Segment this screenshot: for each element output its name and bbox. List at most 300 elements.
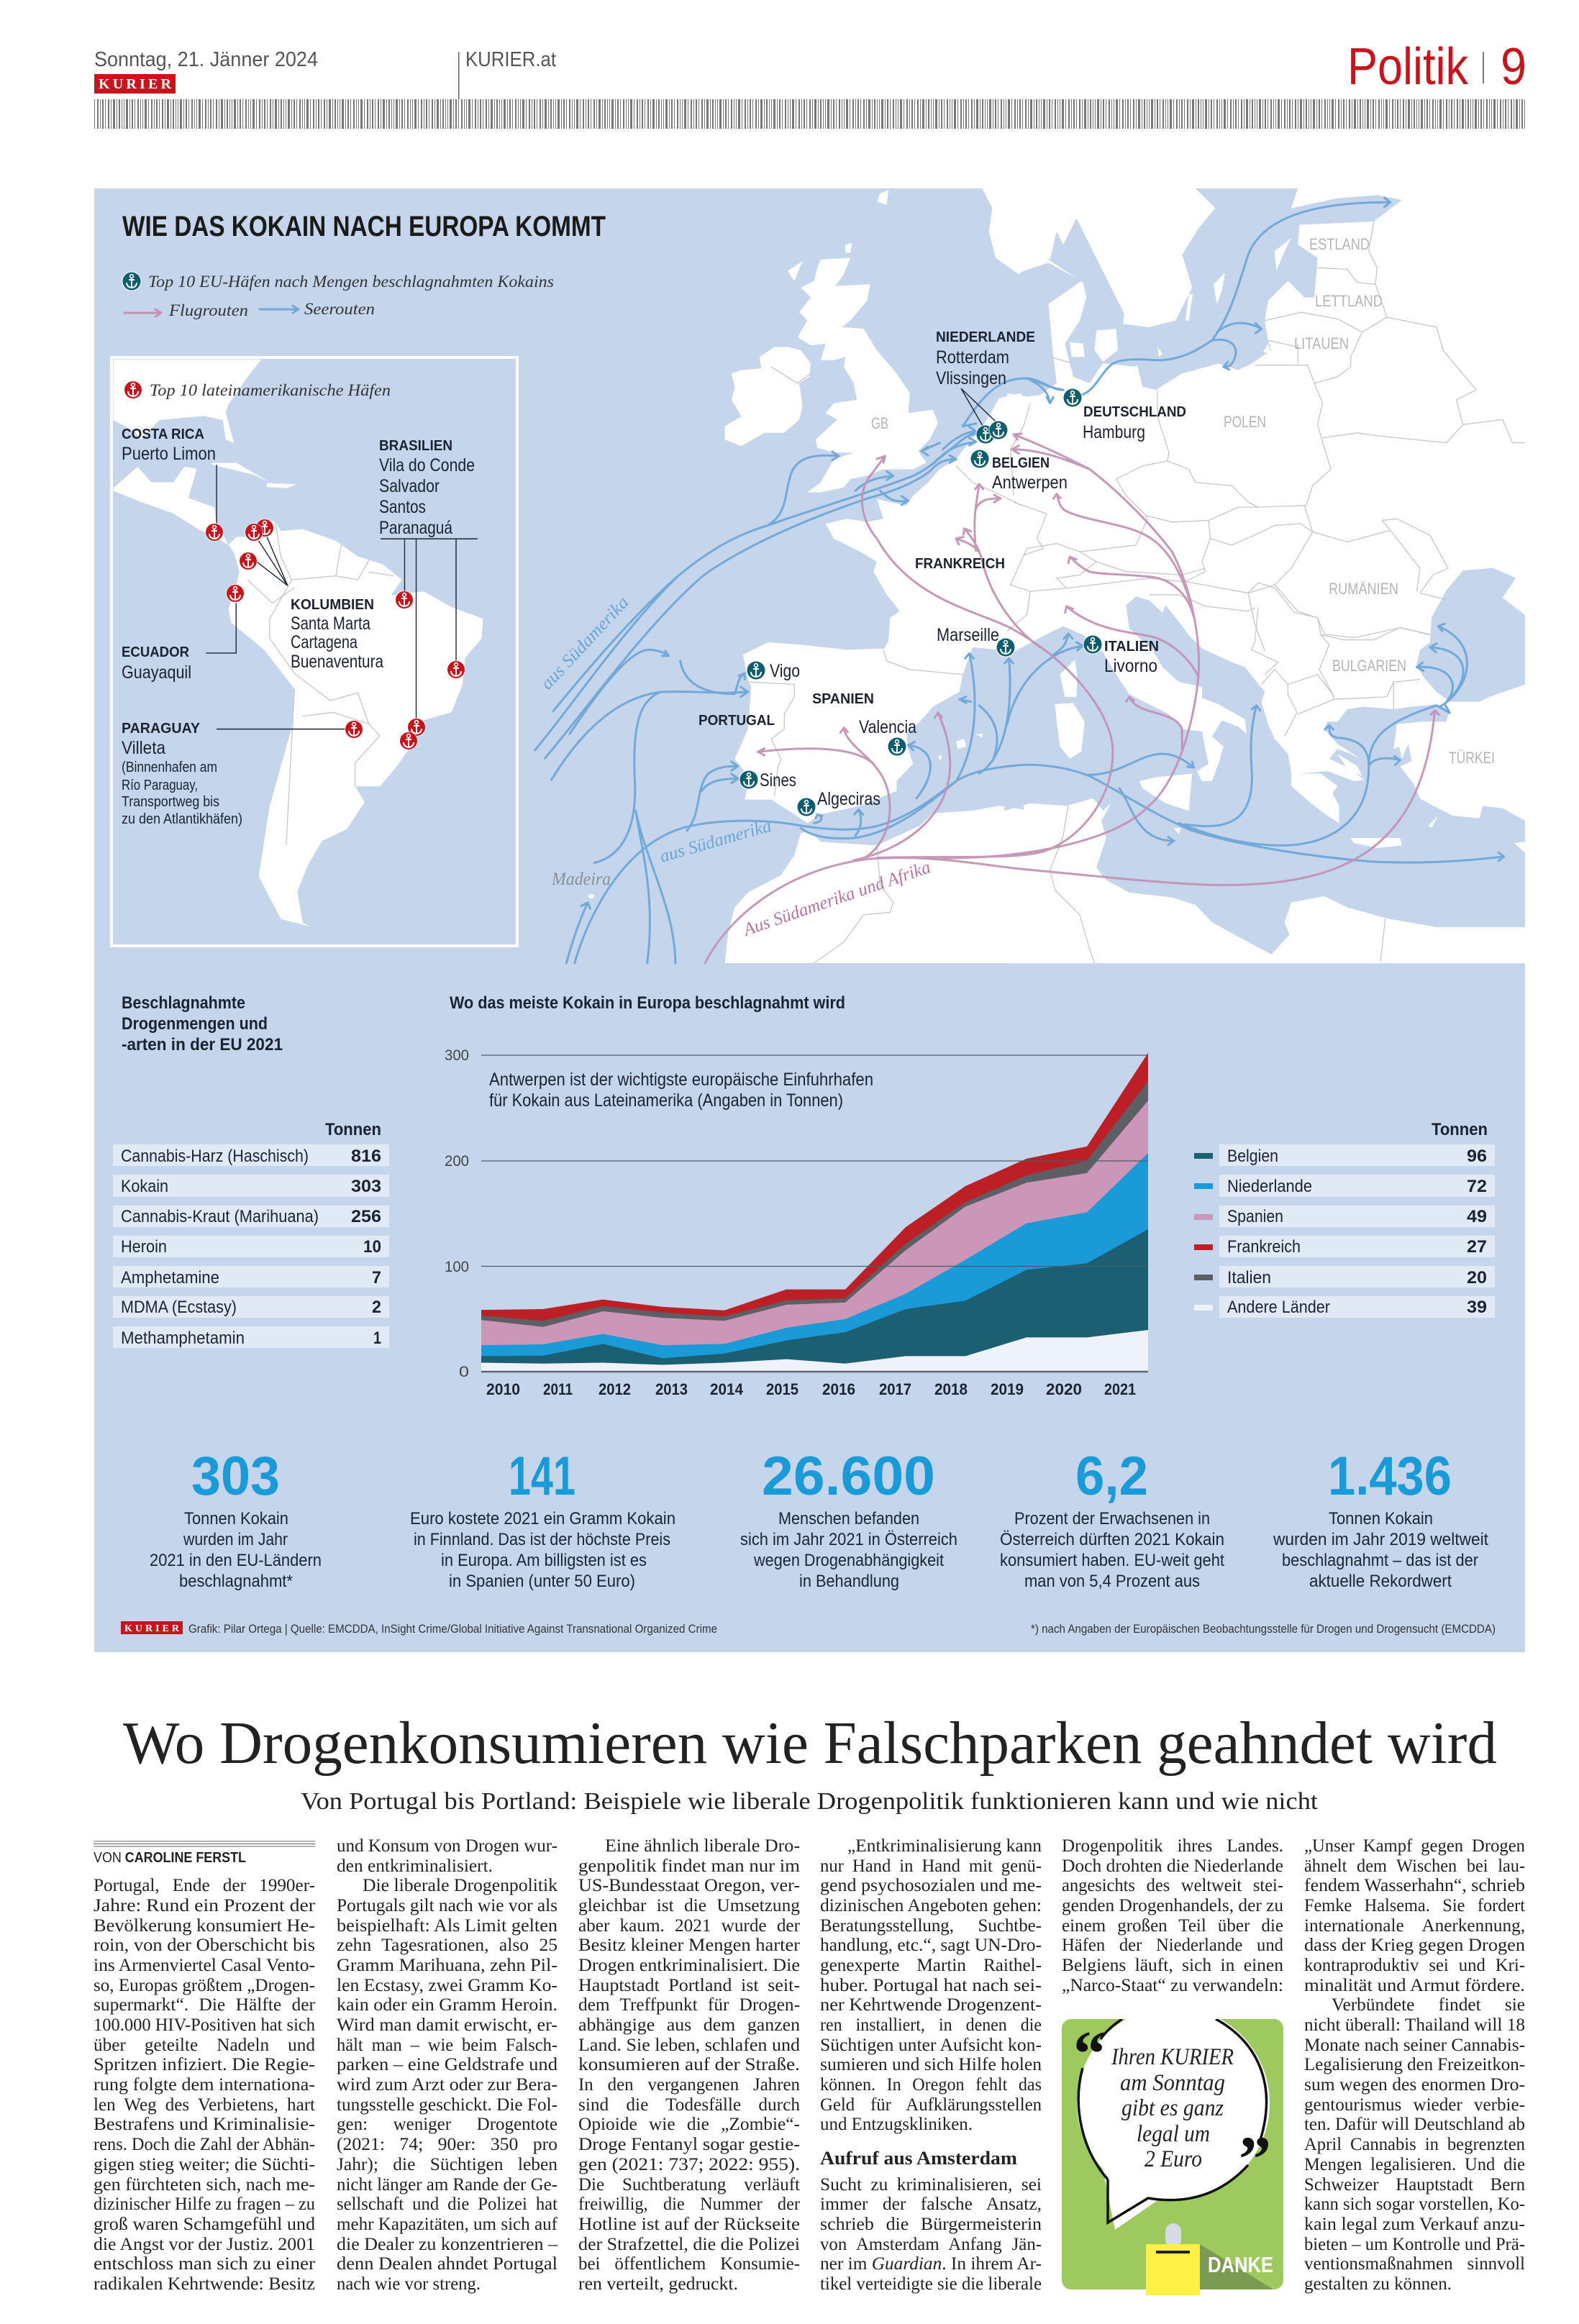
inset labels: Puerto Limon (122, 444, 216, 464)
column 4: Geld für Aufklärungsstellen (820, 2094, 1042, 2115)
ad text: Ihren KURIER (1111, 2044, 1234, 2070)
column 2: kain oder ein Gramm Heroin. (337, 1994, 558, 2015)
column 4 (820, 1835, 1042, 2294)
column 2: hält man – wie beim Falsch- (337, 2034, 558, 2055)
donation box icon (1146, 2223, 1200, 2295)
column 3: Eine ähnlich liberale Dro- (605, 1835, 800, 1856)
column 3: Drogen entkriminalisiert. Die (578, 1954, 800, 1975)
column 4: sumieren und sich Hilfe holen (820, 2054, 1042, 2074)
inset labels: Río Paraguay, (122, 778, 198, 793)
map labels: LETTLAND (1315, 292, 1383, 310)
column 1 (94, 1874, 316, 2294)
map labels: ESTLAND (1309, 235, 1370, 253)
column 4: nur Hand in Hand mit genü- (820, 1855, 1042, 1876)
column 6: ten. Dafür will Deutschland ab (1304, 2113, 1525, 2134)
column 6: kann sich sogar vorstellen, Ko- (1304, 2193, 1525, 2214)
column 5: Häfen der Niederlande und (1062, 1934, 1283, 1955)
table rows: 1 (373, 1329, 381, 1348)
chart annotation: Antwerpen ist der wichtigste europäische Einfuhrhafen (489, 1070, 873, 1090)
map labels: Vlissingen (936, 368, 1006, 388)
column 3 (578, 1835, 801, 2294)
column 3: In den vergangenen Jahren (578, 2074, 800, 2095)
column 2: wird zum Arzt oder zur Bera- (337, 2074, 558, 2095)
column 6: April Cannabis in begrenzten (1304, 2133, 1525, 2154)
column 4: tikel verteidigte sie die liberale (820, 2273, 1042, 2294)
sea routes (535, 198, 1504, 963)
ad text: legal um (1137, 2121, 1210, 2147)
inset labels: Buenaventura (291, 652, 383, 672)
column 5: Belgiens läuft, sich in einen (1062, 1954, 1283, 1975)
column 6 (1304, 1835, 1525, 2294)
column 2 (337, 1835, 558, 2294)
inset labels: ECUADOR (122, 644, 190, 660)
column 5: genden Drogenhandels, der zu (1062, 1895, 1283, 1915)
column 4: immer der falsche Ansatz, (820, 2193, 1042, 2214)
column 5 (1062, 1835, 1283, 1995)
inset labels: Villeta (122, 738, 165, 758)
figure: 303 (150, 1446, 322, 1591)
column 2: len Ecstasy, zwei Gramm Ko- (337, 1974, 558, 1995)
column 4: können. In Oregon fehlt das (820, 2074, 1042, 2095)
map labels: Antwerpen (992, 473, 1068, 493)
table rows (113, 1144, 389, 1348)
column 1: gen fürchteten sich, nach me- (94, 2174, 315, 2195)
chart grid (481, 1055, 1148, 1266)
map labels: RUMÄNIEN (1329, 580, 1398, 598)
column 1: so, Europas größtem „Drogen- (94, 1974, 315, 1995)
map labels: DEUTSCHLAND (1083, 404, 1186, 420)
chart legend table (1194, 1120, 1495, 1318)
figure: 141 (410, 1446, 675, 1591)
column 1: entschloss man sich zu einer (94, 2253, 316, 2274)
legend rows: 49 (1467, 1207, 1487, 1226)
column 6: ventionsmaßnahmen sinnvoll (1304, 2253, 1525, 2274)
Iberia and North Africa (588, 642, 1021, 963)
column 4: Sucht zu kriminalisieren, sei (820, 2174, 1042, 2195)
y axis labels: 300 (445, 1047, 469, 1064)
section name: Politik (1347, 38, 1469, 96)
map labels: BELGIEN (992, 455, 1050, 471)
chart annotation (489, 1070, 873, 1111)
x axis labels: 2016 (822, 1380, 855, 1398)
figure: 141: in Europa. Am billigsten ist es (441, 1551, 647, 1570)
column 1: groß waren Schamgefühl und (94, 2213, 315, 2234)
infographic title: WIE DAS KOKAIN NACH EUROPA KOMMT (122, 211, 606, 242)
y axis labels: 100 (445, 1259, 469, 1275)
graphic credits: Grafik: Pilar Ortega | Quelle: EMCDDA, InSight Crime/Global Initiative Against Transnational Organized Crime (188, 1622, 717, 1636)
figure: 6,2: konsumiert haben. EU-weit geht (1000, 1551, 1224, 1570)
column 3: ren verteilt, gedruckt. (578, 2273, 738, 2294)
key figures (150, 1446, 1488, 1591)
Great Britain (798, 258, 938, 492)
legend rows: 27 (1467, 1237, 1487, 1257)
table rows: 2 (372, 1298, 381, 1317)
table rows: Cannabis-Kraut (Marihuana) (121, 1207, 319, 1226)
legend rows: 20 (1467, 1268, 1487, 1288)
map labels: Aus Südamerika und Afrika (740, 857, 933, 940)
page header (94, 38, 1526, 129)
figure: 26.600: wegen Drogenabhängigkeit (753, 1551, 944, 1570)
x axis labels (486, 1380, 1136, 1398)
column 3: genpolitik findet man nur im (578, 1855, 800, 1876)
byline (94, 1841, 315, 1866)
column 3: aber kaum. 2021 wurde der (578, 1915, 800, 1936)
column 2: Wird man damit erwischt, er- (337, 2014, 558, 2035)
inset labels: PARAGUAY (122, 721, 201, 737)
figure: 303: wurden im Jahr (183, 1530, 288, 1549)
map labels: Algeciras (817, 789, 880, 809)
table rows: 7 (372, 1268, 381, 1288)
column 1: ins Armenviertel Casal Vento- (94, 1954, 315, 1975)
EU port markers (739, 388, 1103, 817)
table rows: 816 (351, 1147, 381, 1166)
column 3: Die Suchtberatung verläuft (578, 2174, 800, 2195)
y axis labels: 200 (445, 1153, 469, 1170)
figure: 6,2: 6,2 (1075, 1446, 1148, 1507)
map: Europe (535, 188, 1525, 963)
inset labels: Salvador (379, 476, 440, 496)
inset labels: KOLUMBIEN (291, 597, 374, 613)
column 4: gend psychosozialen und me- (820, 1874, 1042, 1895)
France and Benelux (826, 393, 1021, 816)
inset land (114, 360, 483, 926)
article headline: Wo Drogenkonsumieren wie Falschparken geahndet wird (123, 1710, 1497, 1777)
x axis labels: 2014 (710, 1380, 744, 1398)
column 3: Besitz kleiner Mengen harter (578, 1934, 801, 1955)
column 2: Portugals gilt nach wie vor als (337, 1895, 558, 1915)
ad text: 2 Euro (1145, 2146, 1202, 2172)
chart legend table: Tonnen (1432, 1120, 1488, 1139)
column 3: Land. Sie leben, schlafen und (578, 2034, 800, 2055)
column 6: ähnelt dem Wischen bei lau- (1304, 1855, 1525, 1876)
figure: 141: in Spanien (unter 50 Euro) (449, 1572, 635, 1591)
column 3: freiwillig, die Nummer der (578, 2193, 800, 2214)
x axis labels: 2013 (655, 1380, 688, 1398)
figure: 6,2 (1000, 1446, 1224, 1591)
column 6: sum wegen des enormen Dro- (1304, 2074, 1525, 2095)
table rows: MDMA (Ecstasy) (121, 1298, 237, 1317)
header date: Sonntag, 21. Jänner 2024 (94, 48, 318, 71)
map labels: Livorno (1104, 656, 1157, 676)
inset labels: Santos (379, 497, 426, 517)
donation ad (1062, 2007, 1283, 2295)
map labels: Sines (760, 770, 796, 790)
inset labels: Santa Marta (291, 614, 370, 634)
figure: 303: Tonnen Kokain (184, 1509, 288, 1528)
figure: 303: 2021 in den EU-Ländern (150, 1551, 322, 1570)
legend rows: Niederlande (1227, 1177, 1312, 1196)
figure: 6,2: man von 5,4 Prozent aus (1024, 1572, 1200, 1591)
map labels: NIEDERLANDE (936, 329, 1035, 345)
column 1: Spritzen infiziert. Die Regie- (94, 2054, 315, 2074)
column 3: Droge Fentanyl sogar gestie- (578, 2133, 800, 2154)
donation ad: ” (1239, 2124, 1271, 2195)
x axis labels: 2020 (1046, 1380, 1082, 1398)
table heading: Beschlagnahmte (122, 993, 245, 1013)
map labels: Madeira (551, 870, 611, 889)
table rows: Amphetamine (121, 1268, 219, 1288)
legend rows: Frankreich (1227, 1237, 1301, 1257)
inset labels: (Binnenhafen am (122, 760, 217, 775)
northern and eastern Europe land (983, 188, 1525, 963)
column 3: bei öffentlichem Konsumie- (578, 2253, 800, 2274)
column 6: nicht überall: Thailand will 18 (1304, 2014, 1525, 2035)
inset leader lines (206, 465, 478, 729)
map legend: Top 10 EU-Häfen nach Mengen beschlagnahmten Kokains (148, 273, 554, 291)
column 1: Portugal, Ende der 1990er- (94, 1874, 315, 1895)
column 5: Drogenpolitik ihres Landes. (1062, 1835, 1283, 1856)
ad text: gibt es ganz (1121, 2095, 1224, 2121)
table rows: Methamphetamin (121, 1329, 245, 1348)
table rows: Cannabis-Harz (Haschisch) (121, 1147, 309, 1166)
figure: 26.600: Menschen befanden (778, 1509, 919, 1528)
figure: 141: in Finnland. Das ist der höchste Preis (414, 1530, 670, 1549)
x axis labels: 2019 (991, 1380, 1024, 1398)
graphic credits: *) nach Angaben der Europäischen Beobachtungsstelle für Drogen und Drogensucht (EMCDDA) (1031, 1622, 1496, 1636)
table heading: -arten in der EU 2021 (122, 1035, 283, 1054)
table rows: Heroin (121, 1237, 167, 1257)
column 2: sellschaft und die Polizei hat (337, 2193, 558, 2214)
column 2: beispielhaft: Als Limit gelten (337, 1915, 558, 1936)
column 3: Opioide wie die „Zombie“- (578, 2113, 800, 2134)
map labels: POLEN (1224, 413, 1266, 431)
column 3: der Strafzettel, die die Polizei (578, 2233, 800, 2254)
map labels: Rotterdam (936, 347, 1009, 368)
column 5: „Narco-Staat“ zu verwandeln: (1062, 1974, 1283, 1995)
column 3: gleichbar ist die Umsetzung (578, 1895, 800, 1915)
column 1: dizinischer Hilfe zu fragen – zu (94, 2193, 315, 2214)
KURIER logo: KURIER (99, 76, 172, 92)
article body (94, 1835, 1525, 2294)
column 1: 100.000 HIV-Positiven hat sich (94, 2014, 315, 2035)
column 3: konsumieren auf der Straße. (578, 2054, 800, 2074)
column 4: und Entzugskliniken. (820, 2113, 973, 2134)
article subheading: Von Portugal bis Portland: Beispiele wie liberale Drogenpolitik funktionieren kann und wie nicht (301, 1788, 1319, 1815)
column 5: Doch drohten die Niederlande (1062, 1855, 1283, 1876)
figure: 1.436: wurden im Jahr 2019 weltweit (1273, 1530, 1488, 1549)
country borders (750, 222, 1525, 963)
map labels (537, 235, 1495, 940)
page number: 9 (1501, 38, 1526, 96)
column 1: len Weg des Verbietens, hart (94, 2094, 315, 2115)
chart annotation: für Kokain aus Lateinamerika (Angaben in Tonnen) (489, 1090, 843, 1111)
map labels: BULGARIEN (1332, 657, 1406, 675)
map labels: Marseille (937, 625, 999, 645)
figure: 1.436 (1273, 1446, 1488, 1591)
column 1: rung folgte dem internationa- (94, 2074, 315, 2095)
ad text (1111, 2044, 1234, 2172)
map labels: Vigo (770, 661, 800, 681)
legend rows: Belgien (1227, 1147, 1278, 1166)
column 3: gen (2021: 737; 2022: 955). (578, 2154, 800, 2174)
map labels: TÜRKEI (1449, 749, 1495, 767)
inset labels: BRASILIEN (379, 438, 452, 454)
column 6: Legalisierung den Freizeitkon- (1304, 2054, 1525, 2074)
column 4: ren installiert, in denen die (820, 2014, 1042, 2035)
column 4: genexperte Martin Raithel- (820, 1954, 1042, 1975)
column 3: abhängige aus dem ganzen (578, 2014, 800, 2035)
column 2: nicht länger am Rande der Ge- (337, 2174, 558, 2195)
column 4: schrieb die Bürgermeisterin (820, 2213, 1042, 2234)
byline: VON CAROLINE FERSTL (94, 1850, 246, 1866)
barcode band (94, 99, 1525, 129)
column 2: (2021: 74; 90er: 350 pro (337, 2133, 558, 2154)
seized drugs table: Tonnen (325, 1120, 381, 1139)
table heading: Drogenmengen und (122, 1014, 268, 1034)
inset legend: Top 10 lateinamerikanische Häfen (150, 381, 391, 399)
column 1: Bevölkerung konsumiert He- (94, 1915, 315, 1936)
legend rows: Italien (1227, 1268, 1271, 1288)
column 4: handlung, etc.“, sagt UN-Dro- (820, 1934, 1042, 1955)
x axis labels: 2015 (766, 1380, 798, 1398)
inset labels: COSTA RICA (122, 427, 204, 442)
y axis labels: 0 (459, 1364, 469, 1380)
quote marks: “ (1073, 2018, 1106, 2090)
y axis labels (445, 1047, 469, 1380)
column 1: supermarkt“. Die Hälfte der (94, 1994, 316, 2015)
figure: 26.600 (740, 1446, 957, 1591)
chart heading: Wo das meiste Kokain in Europa beschlagnahmt wird (450, 993, 845, 1013)
column 2: die Dealer zu konzentrieren – (337, 2233, 558, 2254)
column 6: Verbündete findet sie (1332, 1994, 1525, 2015)
column 6: gestalten zu können. (1304, 2273, 1452, 2294)
column 1: gigen stieg weiter; die Süchti- (94, 2154, 315, 2174)
x axis labels: 2021 (1104, 1380, 1136, 1398)
table rows: 256 (351, 1207, 381, 1226)
legend rows: 39 (1467, 1298, 1487, 1317)
figure: 141: 141 (509, 1446, 575, 1507)
figure: 303: beschlagnahmt* (179, 1572, 293, 1591)
website: KURIER.at (465, 48, 556, 71)
column 1: die Angst vor der Justiz. 2001 (94, 2233, 315, 2254)
column 4: „Entkriminalisierung kann (847, 1835, 1042, 1856)
figure: 26.600: sich im Jahr 2021 in Österreich (740, 1530, 957, 1549)
column 6: bieten – um Kontrolle und Prä- (1304, 2233, 1525, 2254)
figure: 26.600: 26.600 (762, 1446, 935, 1507)
Black Sea (1416, 568, 1525, 702)
x axis labels: 2017 (879, 1380, 911, 1398)
inset labels: Guayaquil (122, 662, 191, 683)
column 4: dizinischen Angeboten gehen: (820, 1895, 1042, 1915)
inset labels: Transportweg bis (122, 794, 219, 810)
column 4: ner im Guardian. In ihrem Ar- (820, 2253, 1042, 2274)
column 6: fendem Wasserhahn“, schrieb (1304, 1874, 1525, 1895)
map labels: aus Südamerika (537, 593, 633, 693)
column 2: Gramm Marihuana, zehn Pil- (337, 1954, 558, 1975)
column 1: rens. Doch die Zahl der Abhän- (94, 2133, 315, 2154)
column 5: angesichts des weltweit stei- (1062, 1874, 1283, 1895)
map labels: aus Südamerika (657, 816, 773, 867)
area chart: seizures by country (445, 993, 1148, 1398)
legend rows: 96 (1467, 1147, 1487, 1166)
column 1: roin, von der Oberschicht bis (94, 1934, 315, 1955)
legend rows: Spanien (1227, 1207, 1283, 1226)
column 3: Hauptstadt Portland ist seit- (578, 1974, 800, 1995)
column 4: Beratungsstellung, Suchtbe- (820, 1915, 1042, 1936)
column 6: gentourismus wieder verbie- (1304, 2094, 1525, 2115)
column 4: ner Kehrtwende Drogenzent- (820, 1994, 1042, 2015)
map labels: LITAUEN (1294, 334, 1349, 352)
column 6: dass der Krieg gegen Drogen (1304, 1934, 1525, 1955)
column 2: Jahr); die Süchtigen leben (337, 2154, 558, 2174)
seized drugs table (113, 993, 389, 1348)
column 6: „Unser Kampf gegen Drogen (1304, 1835, 1525, 1856)
map labels: SPANIEN (812, 691, 874, 707)
figure: 141: Euro kostete 2021 ein Gramm Kokain (410, 1509, 675, 1528)
figure: 26.600: in Behandlung (799, 1572, 899, 1591)
column 4: huber. Portugal hat nach sei- (820, 1974, 1042, 1995)
table rows: 303 (351, 1177, 381, 1196)
column 6: kain legal zum Verkauf anzu- (1304, 2213, 1525, 2234)
x axis labels: 2018 (934, 1380, 968, 1398)
column 6: kontraproduktiv sei und Kri- (1304, 1954, 1525, 1975)
x axis labels: 2012 (599, 1380, 631, 1398)
table rows: 10 (363, 1237, 381, 1257)
column 6: internationale Anerkennung, (1304, 1915, 1525, 1936)
chart areas (481, 1053, 1148, 1372)
DANKE label: DANKE (1208, 2252, 1273, 2277)
map legend (122, 271, 554, 319)
column 3: dem Treffpunkt für Drogen- (578, 1994, 800, 2015)
column 6: Schweizer Hauptstadt Bern (1304, 2174, 1525, 2195)
column 6: Monate nach seiner Cannabis- (1304, 2034, 1525, 2055)
map legend: Flugrouten (168, 301, 248, 319)
column 1: über geteilte Nadeln und (94, 2034, 315, 2055)
figure: 303: 303 (191, 1446, 280, 1507)
column 2: den entkriminalisiert. (337, 1855, 493, 1876)
column 5: einem großen Teil über die (1062, 1915, 1283, 1936)
speech bubble (1077, 2007, 1273, 2289)
map labels: PORTUGAL (699, 713, 775, 729)
map legend: Seerouten (304, 300, 375, 318)
graphic credits (121, 1621, 1496, 1636)
figure: 6,2: Prozent der Erwachsenen in (1014, 1509, 1210, 1528)
inset labels: zu den Atlantikhäfen) (122, 811, 242, 827)
Baltic Sea (1047, 188, 1402, 390)
column 2: Die liberale Drogenpolitik (363, 1874, 558, 1895)
Latin American port markers (205, 519, 465, 750)
map labels: Hamburg (1083, 422, 1145, 442)
graphic credits: KURIER (124, 1623, 180, 1634)
ad text: am Sonntag (1120, 2070, 1225, 2096)
column 3: Hotline ist auf der Rückseite (578, 2213, 800, 2234)
Ireland (725, 347, 811, 446)
figure: 1.436: Tonnen Kokain (1329, 1509, 1433, 1528)
table rows: Kokain (121, 1177, 168, 1196)
Netherlands leader lines (961, 388, 996, 426)
x axis labels: 2011 (543, 1380, 573, 1398)
column 2: und Konsum von Drogen wur- (337, 1835, 558, 1856)
inset labels: Vila do Conde (379, 455, 475, 475)
column 6: Femke Halsema. Sie fordert (1304, 1895, 1525, 1915)
legend rows: Andere Länder (1227, 1298, 1330, 1317)
infographic panel background (94, 188, 1525, 1652)
column 2: zehn Tagesrationen, also 25 (337, 1934, 558, 1955)
figure: 1.436: beschlagnahmt – das ist der (1282, 1551, 1478, 1570)
inset labels (122, 427, 475, 827)
map labels: Valencia (859, 717, 916, 737)
Mediterranean Sea (807, 647, 1024, 845)
table heading (122, 993, 283, 1054)
column 4: Süchtigen unter Aufsicht kon- (820, 2034, 1042, 2055)
column 1: Bestrafens und Kriminalisie- (94, 2113, 315, 2134)
column 1: radikalen Kehrtwende: Besitz (94, 2273, 315, 2294)
x axis labels: 2010 (486, 1380, 520, 1398)
column 3: sind die Todesfälle durch (578, 2094, 800, 2115)
column 6: minalität und Armut fördere. (1304, 1974, 1525, 1995)
column 2: parken – eine Geldstrafe und (337, 2054, 558, 2074)
inset labels: Cartagena (291, 632, 358, 652)
